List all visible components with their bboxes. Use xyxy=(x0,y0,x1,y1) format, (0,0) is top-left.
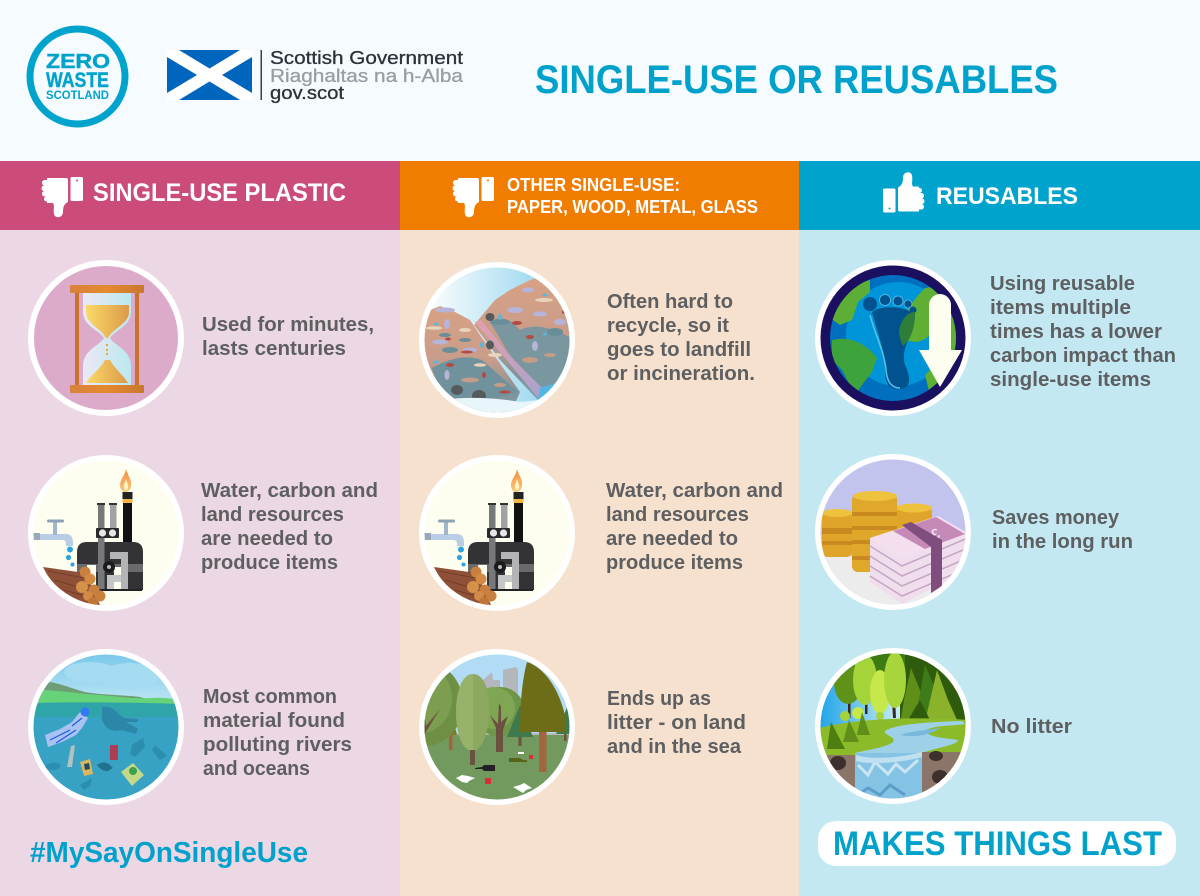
logo: Zero Waste Scotland xyxy=(30,29,125,124)
text: ends up as litter: Ends up as xyxy=(607,688,711,710)
text: lower carbon impact: single-use items xyxy=(990,369,1151,391)
icon: coins and banknotes xyxy=(815,454,971,610)
text: saves money: Saves money xyxy=(992,507,1120,529)
logo: Zero Waste Scotland: SCOTLAND xyxy=(46,88,109,102)
logo: Zero Waste Scotland: WASTE xyxy=(46,69,109,92)
logo: Scottish Government: gov.scot xyxy=(270,83,344,103)
text: used for minutes xyxy=(202,314,374,360)
icon: coins and banknotes: £ xyxy=(929,525,943,544)
logo: Scottish Government xyxy=(167,48,464,103)
text: water carbon land: Water, carbon and xyxy=(606,480,783,502)
icon: plastic polluting water xyxy=(28,649,184,805)
text: used for minutes: Used for minutes, xyxy=(202,314,374,336)
text: hard to recycle: Often hard to xyxy=(607,291,733,313)
text: most common material xyxy=(203,686,352,780)
text: water carbon land xyxy=(201,480,378,574)
panel: reusables xyxy=(799,161,1200,896)
text: hard to recycle xyxy=(607,291,755,385)
header bar: single-use plastic: SINGLE-USE PLASTIC xyxy=(93,179,346,207)
panel: single-use plastic xyxy=(0,161,400,896)
text: most common material: polluting rivers xyxy=(203,734,352,756)
text: most common material: material found xyxy=(203,710,345,732)
text: lower carbon impact: times has a lower xyxy=(990,321,1162,343)
icon: carbon footprint on globe xyxy=(815,260,971,416)
header bar: reusables xyxy=(799,161,1200,230)
text: water carbon land: land resources xyxy=(606,504,749,526)
text: saves money: in the long run xyxy=(992,531,1133,553)
text: lower carbon impact: Using reusable xyxy=(990,273,1135,295)
logo: Scottish Government: Riaghaltas na h-Alba xyxy=(270,66,464,86)
text: hard to recycle: recycle, so it xyxy=(607,315,729,337)
icon: hourglass xyxy=(31,263,181,413)
icon: littered park xyxy=(419,649,575,805)
header bar: single-use plastic xyxy=(0,161,400,230)
icon: landfill xyxy=(419,262,575,418)
text: water carbon land: Water, carbon and xyxy=(201,480,378,502)
text: water carbon land: are needed to xyxy=(606,528,738,550)
text: ends up as litter xyxy=(607,688,746,758)
text: water carbon land xyxy=(606,480,783,574)
header bar: other single-use xyxy=(400,161,799,230)
text: most common material: and oceans xyxy=(203,758,310,780)
header bar: other single-use: PAPER, WOOD, METAL, GLASS xyxy=(507,197,758,217)
logo: Scottish Government: Scottish Government xyxy=(270,48,463,68)
header bar: other single-use: OTHER SINGLE-USE: xyxy=(507,175,680,195)
text: lower carbon impact: items multiple xyxy=(990,297,1131,319)
text: hard to recycle: or incineration. xyxy=(607,363,755,385)
icon: clean forest and waterfall xyxy=(815,648,980,805)
hashtag: #MySayOnSingleUse xyxy=(30,837,308,869)
text: water carbon land: produce items xyxy=(201,552,338,574)
title: SINGLE-USE OR REUSABLES xyxy=(535,58,1058,102)
text: lower carbon impact xyxy=(990,273,1176,391)
text: water carbon land: land resources xyxy=(201,504,344,526)
text: most common material: Most common xyxy=(203,686,337,708)
text: no litter: No litter xyxy=(991,716,1072,738)
text: water carbon land: are needed to xyxy=(201,528,333,550)
text: saves money xyxy=(992,507,1133,553)
slogan: makes things last: MAKES THINGS LAST xyxy=(833,825,1162,863)
header bar: reusables: REUSABLES xyxy=(936,183,1078,210)
text: hard to recycle: goes to landfill xyxy=(607,339,751,361)
text: lower carbon impact: carbon impact than xyxy=(990,345,1176,367)
icon: factory, water and wood xyxy=(28,455,184,611)
text: water carbon land: produce items xyxy=(606,552,743,574)
text: used for minutes: lasts centuries xyxy=(202,338,346,360)
text: ends up as litter: and in the sea xyxy=(607,736,742,758)
icon: factory, water and wood xyxy=(419,455,575,611)
text: ends up as litter: litter - on land xyxy=(607,712,746,734)
panel: other single-use xyxy=(384,161,799,896)
logo: Zero Waste Scotland: ZERO xyxy=(46,50,110,73)
